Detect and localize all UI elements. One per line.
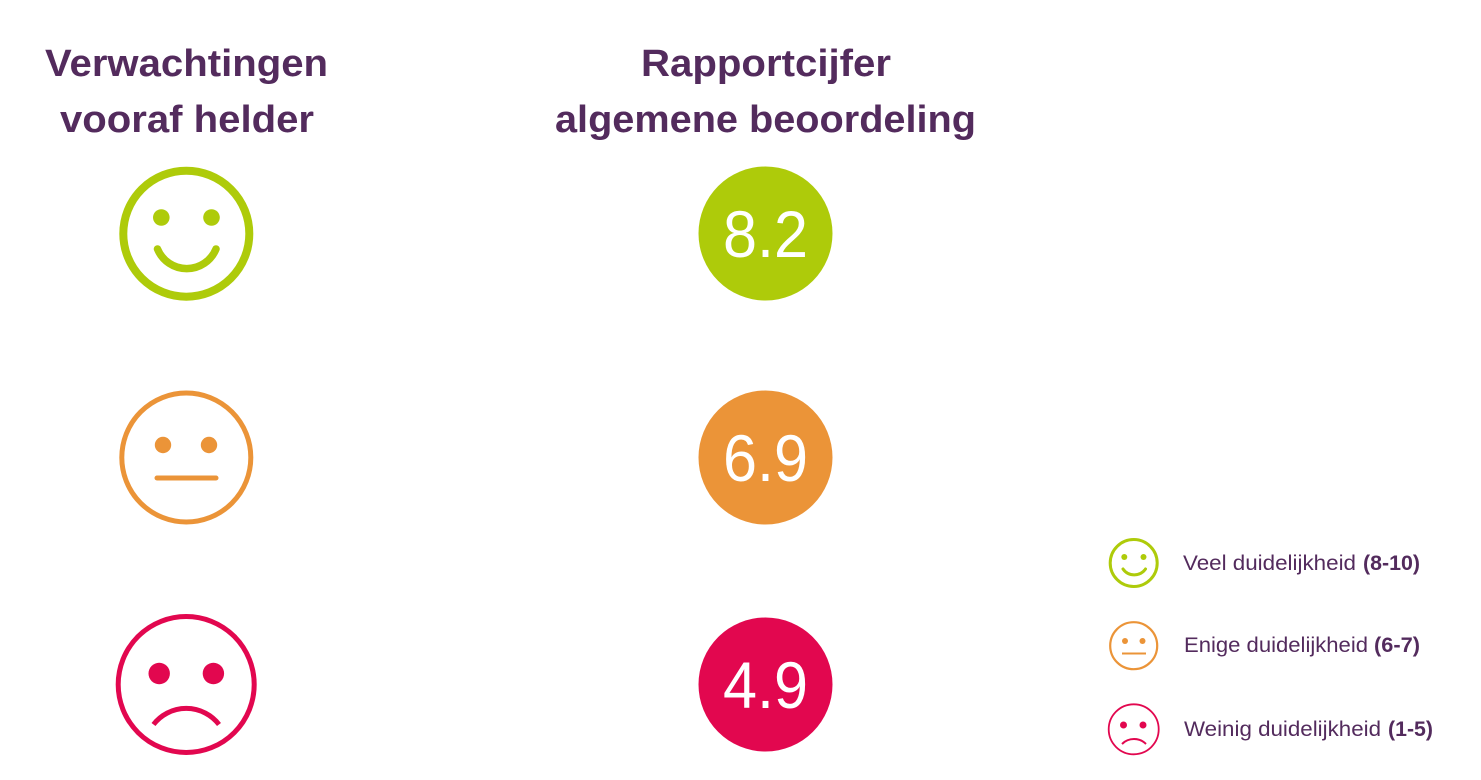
legend item: Veel duidelijkheid: (8-10)	[1363, 552, 1420, 575]
score badge: 6.9: 6.9	[723, 421, 808, 495]
legend item: Weinig duidelijkheid: Weinig duidelijkheid	[1184, 718, 1381, 741]
score badge: 8.2	[698, 166, 832, 300]
icon: large happy face	[123, 171, 249, 297]
heading: Rapportcijfer algemene beoordeling: algemene beoordeling	[555, 99, 976, 141]
legend item: Veel duidelijkheid: Veel duidelijkheid	[1183, 552, 1356, 575]
heading: Verwachtingen vooraf helder: vooraf helder	[60, 99, 314, 141]
score badge: 4.9: 4.9	[723, 648, 808, 722]
legend item: Enige duidelijkheid: Enige duidelijkheid	[1184, 634, 1368, 657]
score badge: 6.9	[698, 390, 832, 524]
heading: Verwachtingen vooraf helder: Verwachtingen	[45, 43, 328, 85]
icon: large sad face	[118, 616, 254, 752]
legend item: Enige duidelijkheid: (6-7)	[1374, 634, 1420, 657]
legend item: Weinig duidelijkheid	[1109, 704, 1433, 754]
heading: Verwachtingen vooraf helder	[45, 43, 328, 141]
legend item: Enige duidelijkheid	[1110, 622, 1420, 669]
icon: large neutral face	[122, 393, 251, 522]
heading: Rapportcijfer algemene beoordeling	[555, 43, 976, 141]
legend item: Weinig duidelijkheid: (1-5)	[1388, 718, 1433, 741]
legend item: Veel duidelijkheid	[1110, 540, 1420, 586]
score badge: 4.9	[698, 618, 832, 752]
legend	[1109, 540, 1433, 754]
score badge: 8.2: 8.2	[723, 197, 808, 271]
heading: Rapportcijfer algemene beoordeling: Rapportcijfer	[641, 43, 891, 85]
